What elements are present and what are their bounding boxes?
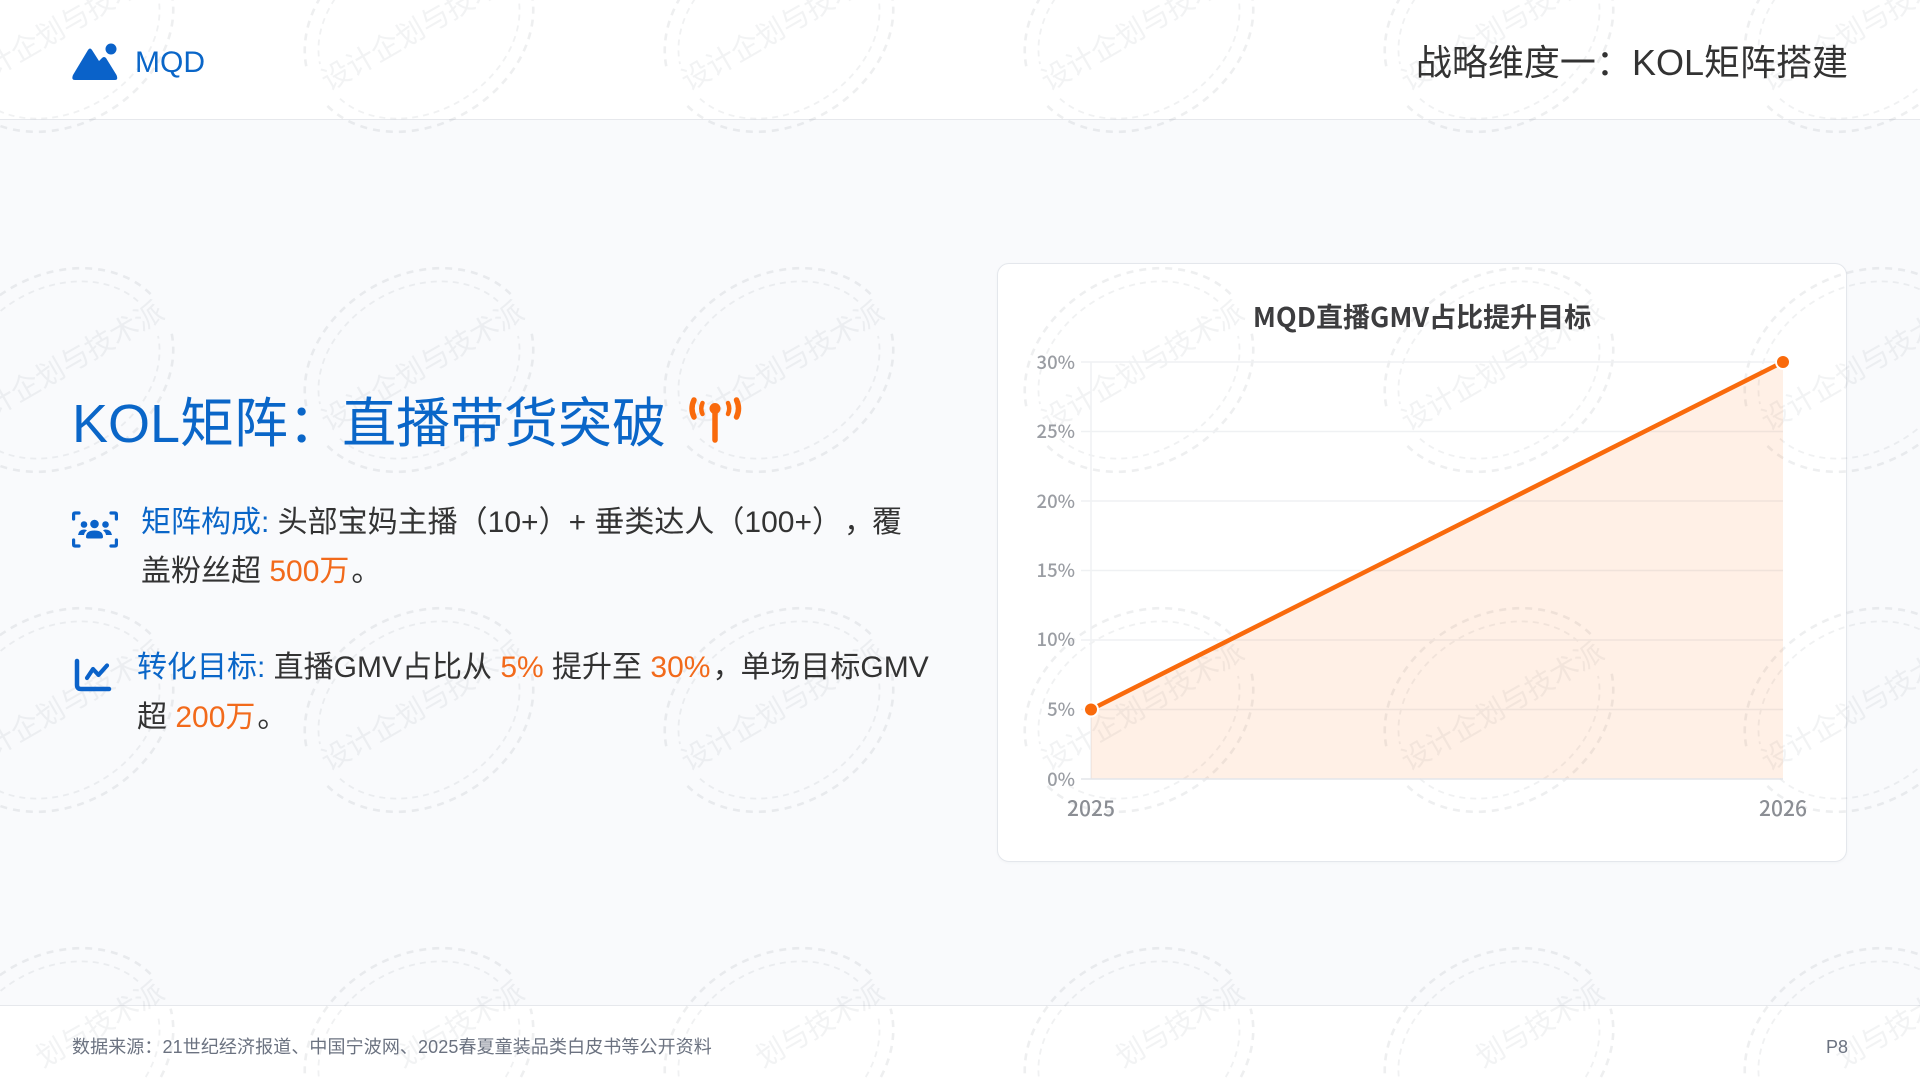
chart: MQD live GMV share target [1037, 296, 1807, 823]
watermark pattern: 划与技术派 [1107, 970, 1251, 1076]
matrix line 1: 矩阵构成: 头部宝妈主播（10+）+ 垂类达人（100+），覆 [141, 506, 902, 539]
x-axis labels: 2025 [1067, 793, 1115, 823]
watermark pattern: 划与技术派 [1467, 970, 1611, 1076]
icon: broadcast tower [689, 397, 742, 443]
y-axis labels: 30% [1037, 349, 1075, 375]
y-axis labels: 5% [1047, 696, 1075, 722]
growth line [1091, 362, 1783, 710]
y-axis labels [1037, 349, 1075, 792]
conversion line 1: 转化目标: 直播GMV占比从 5% 提升至 30%，单场目标GMV [137, 651, 929, 684]
area fill [1091, 362, 1783, 779]
x-axis labels [1067, 793, 1807, 823]
watermark pattern: 设计企划与技术派 [1033, 630, 1251, 779]
chart title: MQD直播GMV占比提升目标 [1253, 296, 1591, 335]
watermark pattern: 设计企划与技术派 [1033, 290, 1251, 439]
watermark pattern: 设计企划与技术派 [1393, 290, 1611, 439]
brand name: MQD [135, 46, 205, 79]
y-axis labels: 0% [1047, 766, 1075, 792]
icon: line chart [74, 658, 112, 692]
footer background [0, 1005, 1920, 1080]
y-axis labels: 15% [1037, 557, 1075, 583]
watermark pattern: 划与技术派 [387, 970, 531, 1076]
icon: MQD mountain logo [72, 44, 118, 80]
matrix line 2: 盖粉丝超 500万。 [141, 555, 381, 588]
data source note: 数据来源：21世纪经济报道、中国宁波网、2025春夏童装品类白皮书等公开资料 [72, 1037, 712, 1057]
watermark pattern: 设计企划与技术派 [313, 290, 531, 439]
conversion line 2: 超 200万。 [137, 701, 287, 734]
watermark pattern: 设计企划与技术派 [673, 630, 891, 779]
y-axis labels: 25% [1037, 418, 1075, 444]
x-axis labels: 2026 [1759, 793, 1807, 823]
data points [1084, 355, 1790, 716]
bullet: matrix composition [72, 506, 902, 588]
main heading: KOL矩阵：直播带货突破 [72, 394, 666, 454]
page number: P8 [1826, 1037, 1848, 1057]
y-axis labels: 20% [1037, 488, 1075, 514]
panel: chart card [997, 263, 1847, 862]
bullet: conversion target [74, 651, 929, 734]
watermark pattern: 划与技术派 [27, 970, 171, 1076]
watermark pattern: 设计企划与技术派 [673, 290, 891, 439]
header background [0, 0, 1920, 120]
icon: users in viewfinder [72, 511, 118, 548]
watermark pattern: 设计企划与技术派 [1393, 630, 1611, 779]
watermark pattern: 划与技术派 [747, 970, 891, 1076]
page section title: 战略维度一：KOL矩阵搭建 [1416, 42, 1848, 83]
y-axis labels: 10% [1037, 626, 1075, 652]
watermark pattern: 设计企划与技术派 [313, 630, 531, 779]
